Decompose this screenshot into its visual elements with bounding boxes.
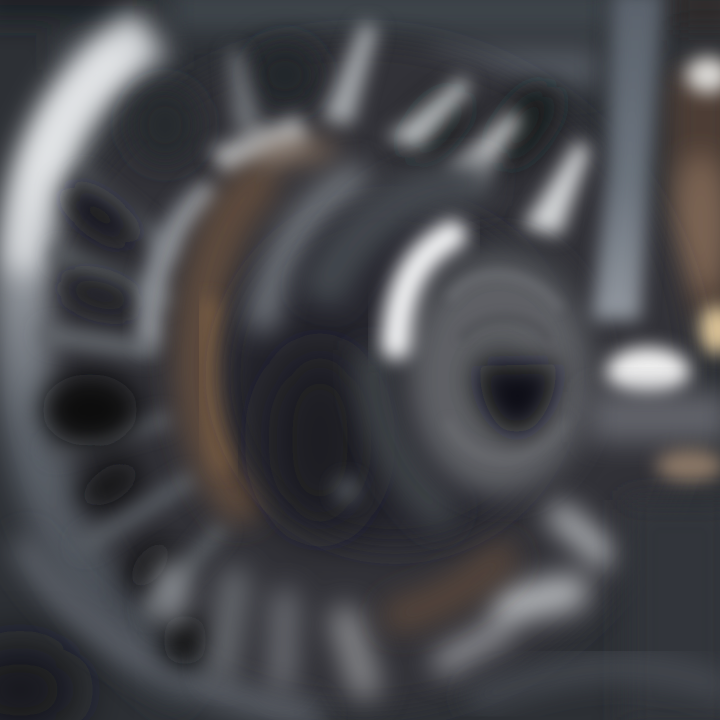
shaft extension [590,392,720,442]
rust streak [209,300,228,470]
dark blade gaps [42,41,569,666]
inner left rim [150,195,205,335]
ring highlight [22,50,125,270]
hub lower dark [268,350,372,530]
lower ring sweep [20,540,320,718]
lower blades [170,515,605,685]
vertical bar [592,0,664,320]
bright upper blades [210,22,590,236]
rust band [198,150,500,615]
blade 5 [228,50,262,130]
small lower hub detail [333,476,361,504]
lower right region [625,500,720,720]
left spokes [50,180,220,610]
outer ring [22,32,190,690]
hub rim light arc [262,175,365,330]
blade 1 [322,22,378,125]
blade 4 [522,140,590,236]
bottom left shadow [0,645,80,720]
blade base [210,115,310,175]
dark disc centre [478,364,558,434]
bright blob top right [686,57,720,93]
dark main hub ring [223,203,567,547]
disc texture [448,275,565,458]
bright shaft [606,347,690,397]
tan blob [656,449,720,483]
top housing [0,0,610,88]
hub mid shading [320,184,490,300]
blade 3 [446,110,522,186]
front disc [404,240,596,496]
blade 2 [386,76,472,150]
hub mid grey band [372,350,450,520]
warm background at right [668,0,720,320]
white highlight [396,235,452,345]
warm glow [696,306,720,354]
bottom sweep [470,668,720,700]
